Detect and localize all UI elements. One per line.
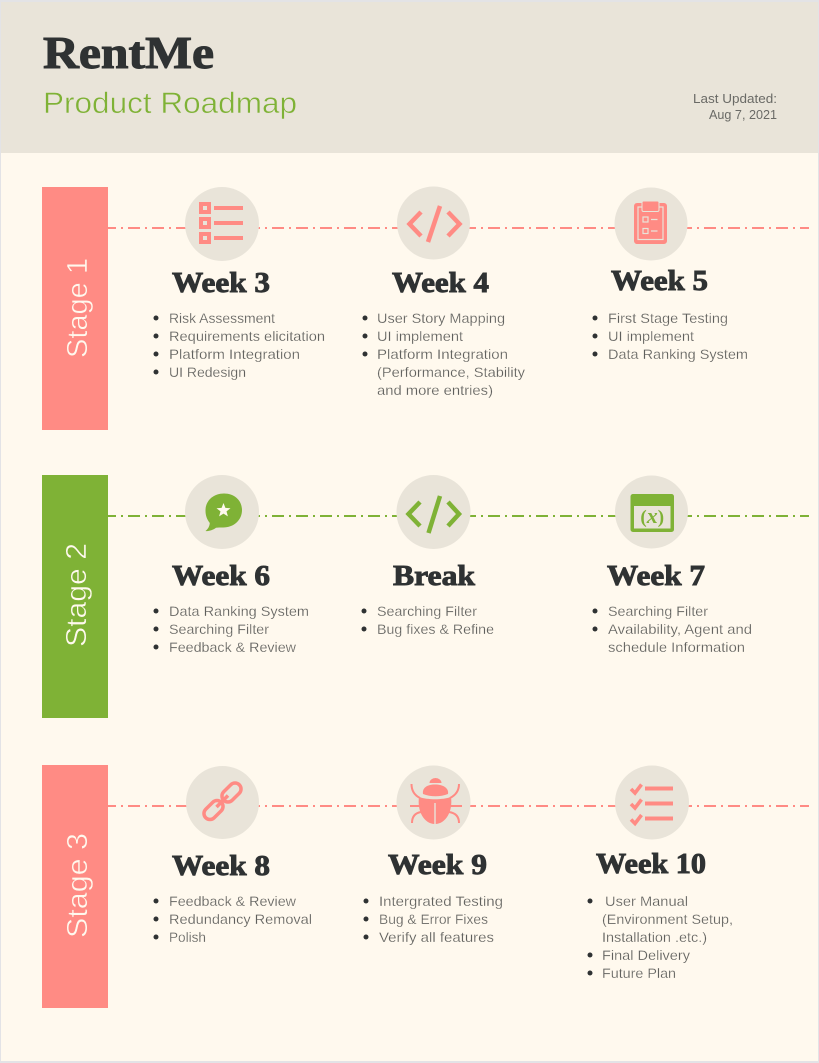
timeline: stage 2: [108, 515, 809, 517]
list: week 7: Searching Filter: [608, 603, 708, 619]
list: week 6: Searching Filter: [169, 621, 269, 637]
heading: week 10: Week 10: [596, 849, 706, 880]
list: week 4: (Performance, Stability: [377, 364, 525, 380]
list: week 10: Final Delivery: [602, 947, 690, 963]
column: week 7: [592, 476, 752, 655]
column: week 4: [362, 186, 525, 398]
list: week 9: [364, 893, 503, 945]
heading: week 7: Week 7: [607, 561, 705, 592]
heading: week 6: Week 6: [172, 561, 270, 592]
subtitle: Product Roadmap: [43, 87, 297, 120]
heading: week 9: Week 9: [388, 850, 487, 881]
column: week 5: [592, 188, 748, 362]
list: week 8: Feedback & Review: [169, 893, 297, 909]
column: week 10: [588, 766, 733, 981]
list: week 7: schedule Information: [608, 639, 745, 655]
list: week 10: (Environment Setup,: [602, 911, 733, 927]
list: break: Searching Filter: [377, 603, 477, 619]
list: week 4: and more entries): [377, 382, 493, 398]
icon: check list: [631, 784, 673, 824]
list: week 8: [154, 893, 312, 945]
panel: stage 1: [42, 186, 809, 430]
stage 1 label bar: Stage 1: [62, 258, 94, 358]
list: week 6: Data Ranking System: [169, 603, 309, 619]
panel: stage 2: [42, 475, 809, 718]
icon: checklist squares: [199, 202, 243, 244]
list: week 7: [592, 603, 752, 655]
list: week 10: Installation .etc.): [602, 929, 707, 945]
icon: variable window: [630, 494, 674, 532]
list: week 4: User Story Mapping: [377, 310, 505, 326]
icon: beetle: [410, 778, 462, 824]
list: week 8: Polish: [169, 929, 206, 945]
list: week 4: Platform Integration: [377, 346, 508, 362]
icon: speech bubble with star: [206, 494, 242, 531]
last updated note: [693, 91, 777, 122]
list: week 6: Feedback & Review: [169, 639, 297, 655]
list: week 5: [592, 310, 748, 362]
list: week 7: Availability, Agent and: [608, 621, 752, 637]
list: week 4: [362, 310, 525, 398]
heading: week 8: Week 8: [172, 851, 270, 882]
list: break: [362, 603, 494, 637]
list: week 5: Data Ranking System: [608, 346, 748, 362]
column: break: [362, 475, 494, 637]
list: week 3: UI Redesign: [169, 364, 246, 380]
stage 3 label bar: Stage 3: [62, 833, 94, 938]
list: break: Bug fixes & Refine: [377, 621, 494, 637]
column: week 8: [154, 766, 312, 945]
header band: [1, 2, 818, 153]
panel: stage 3: [42, 765, 809, 1008]
heading: break: Break: [393, 561, 475, 592]
list: week 6: [154, 603, 309, 655]
list: week 9: Intergrated Testing: [379, 893, 503, 909]
stage 3 label bar: [42, 765, 108, 1008]
last updated note: Aug 7, 2021: [709, 107, 777, 122]
heading: week 5: Week 5: [611, 266, 708, 297]
list: week 3: Risk Assessment: [169, 310, 275, 326]
list: week 9: Verify all features: [379, 929, 494, 945]
column: week 9: [364, 766, 503, 945]
stage 2 label bar: Stage 2: [61, 543, 93, 647]
stage 1 label bar: [42, 187, 108, 430]
list: week 3: Platform Integration: [169, 346, 300, 362]
icon: chain link: [201, 780, 244, 822]
list: week 8: Redundancy Removal: [169, 911, 312, 927]
list: week 3: [154, 310, 325, 380]
heading: week 4: Week 4: [392, 268, 489, 299]
column: week 6: [154, 475, 309, 655]
list: week 3: Requirements elicitation: [169, 328, 325, 344]
list: week 4: UI implement: [377, 328, 463, 344]
icon: code brackets: [408, 496, 459, 533]
heading: week 3: Week 3: [172, 268, 270, 299]
list: week 10: [588, 893, 733, 981]
list: week 9: Bug & Error Fixes: [379, 911, 488, 927]
list: week 10: Future Plan: [602, 965, 676, 981]
timeline: stage 3: [108, 805, 809, 807]
stage 2 label bar: [42, 475, 108, 718]
title: RentMe: [43, 27, 214, 78]
timeline: stage 1: [108, 227, 809, 229]
icon: variable window: (x): [640, 503, 664, 528]
icon: code brackets: [410, 206, 460, 242]
list: week 5: First Stage Testing: [608, 310, 728, 326]
column: week 3: [154, 187, 325, 380]
last updated note: Last Updated:: [693, 91, 777, 106]
list: week 5: UI implement: [608, 328, 694, 344]
icon: clipboard: [634, 201, 667, 244]
list: week 10: User Manual: [605, 893, 688, 909]
